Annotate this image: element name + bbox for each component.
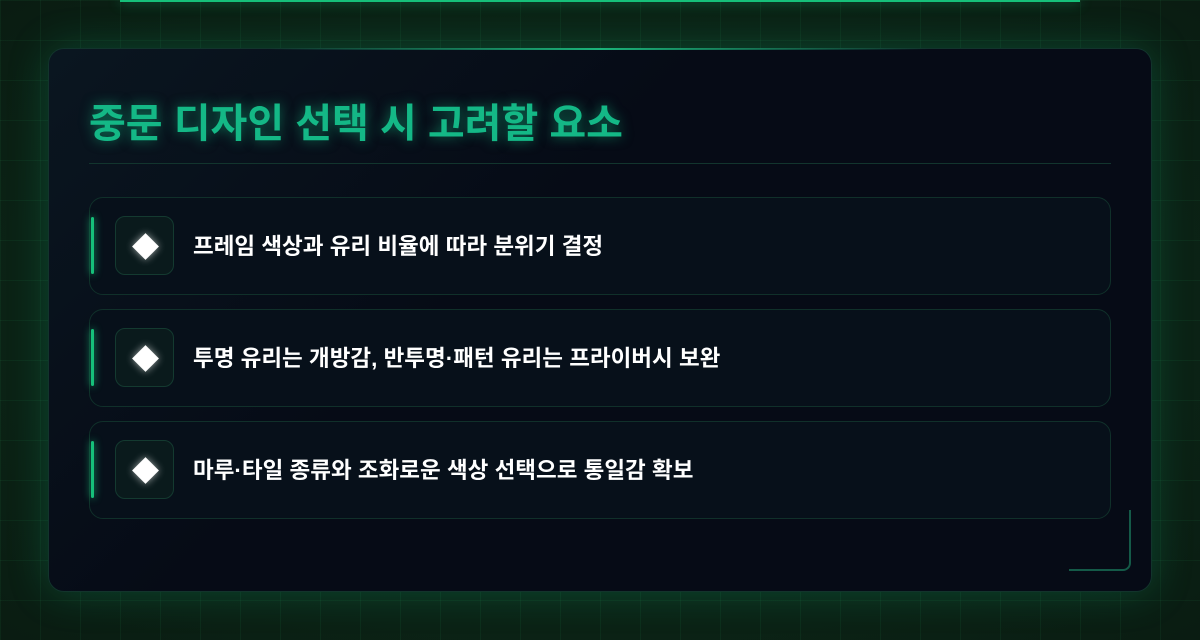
text 2: 투명 유리는 개방감, 반투명·패턴 유리는 프라이버시 보완 xyxy=(193,346,720,371)
icon: diamond xyxy=(115,328,174,387)
title: 중문 디자인 선택 시 고려할 요소 xyxy=(89,102,623,146)
panel: main card xyxy=(48,48,1152,592)
item 3 xyxy=(89,421,1111,519)
text 3: 마루·타일 종류와 조화로운 색상 선택으로 통일감 확보 xyxy=(193,458,693,483)
item 2 xyxy=(89,309,1111,407)
icon: diamond xyxy=(115,216,174,275)
icon: diamond xyxy=(115,440,174,499)
text 1: 프레임 색상과 유리 비율에 따라 분위기 결정 xyxy=(193,234,603,259)
item 1 xyxy=(89,197,1111,295)
